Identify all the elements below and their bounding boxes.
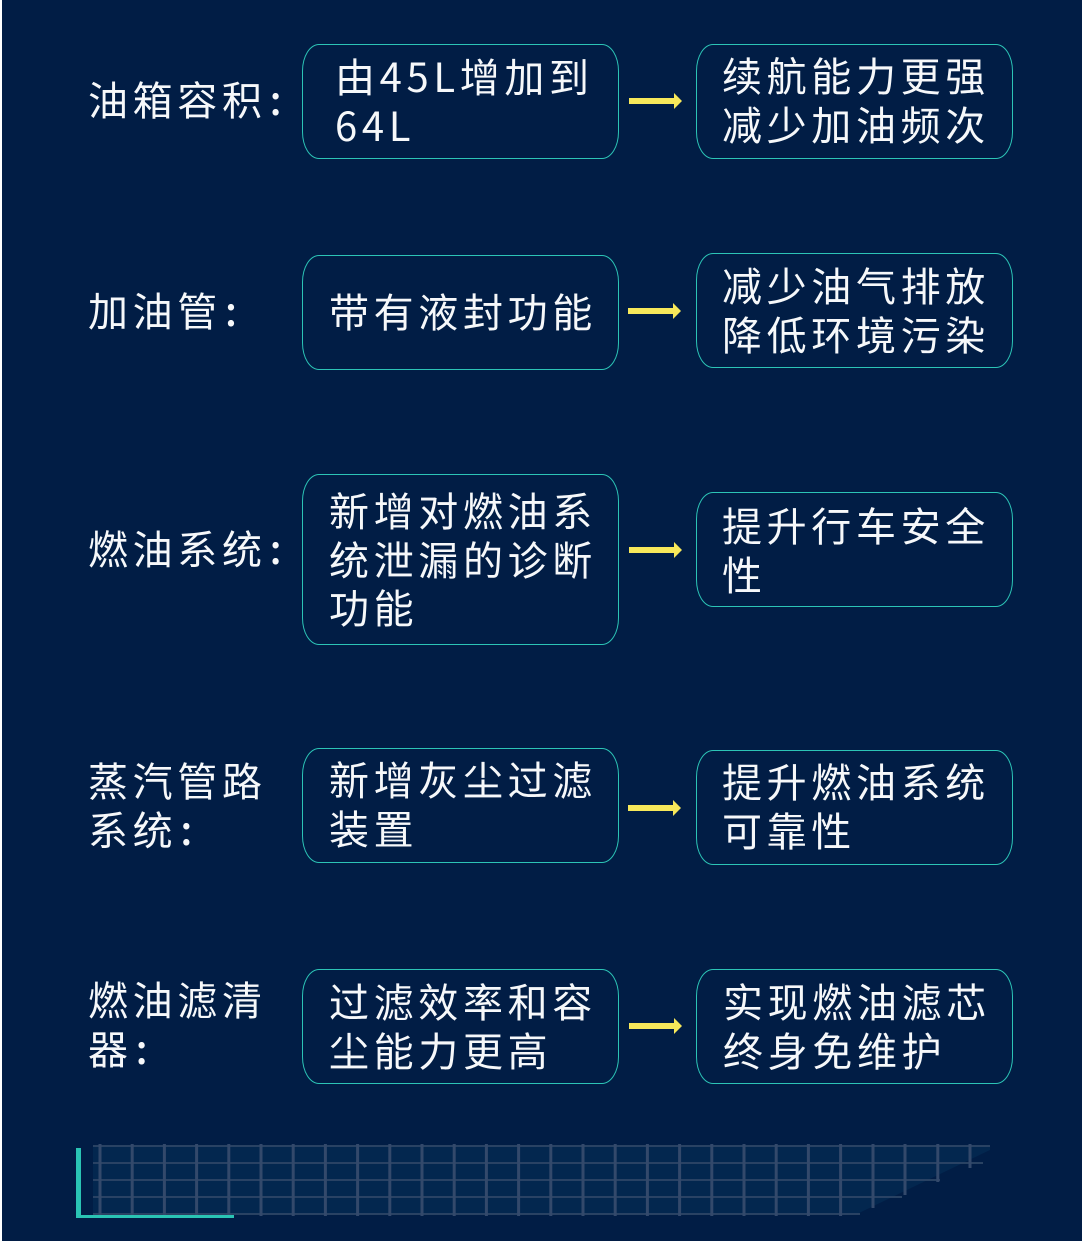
row 5 left box (302, 969, 619, 1084)
row 2 right box (696, 253, 1013, 368)
row 3 label: 燃油系统: (88, 518, 286, 576)
row 1 left text (335, 46, 594, 152)
teal corner bracket (76, 1148, 234, 1218)
row 3 left text: 统泄漏的诊断 (329, 528, 597, 586)
row 4 left text (329, 749, 597, 856)
row 1 label: 油箱容积: (88, 69, 286, 127)
row 4 label: 系统: (88, 798, 197, 856)
decorative grid panel (93, 1144, 990, 1216)
row 1 right text (722, 45, 990, 152)
row 1 left text: 64L (335, 94, 415, 152)
row 4 right text: 提升燃油系统 (722, 751, 990, 809)
row 4 left text: 装置 (329, 798, 418, 856)
row 1 right text: 续航能力更强 (722, 45, 990, 103)
row 5 left text: 尘能力更高 (329, 1020, 552, 1078)
row 3 arrow (629, 542, 682, 558)
row 5 right text: 终身免维护 (723, 1020, 946, 1078)
row 5 label: 燃油滤清 (88, 969, 267, 1027)
row 3 right box (696, 492, 1013, 607)
row 2 label: 加油管: (88, 280, 242, 338)
row 3 left box (302, 474, 619, 645)
row 5 right text (723, 971, 991, 1078)
row 2 right text: 降低环境污染 (722, 304, 990, 362)
row 4 label: 蒸汽管路 (88, 750, 267, 808)
row 4 right box (696, 750, 1013, 865)
row 3 right text (722, 495, 990, 602)
row 2 left box (302, 255, 619, 370)
row 4 left box (302, 748, 619, 863)
row 3 right text: 提升行车安全 (722, 495, 990, 553)
row 5 label: 器: (88, 1018, 152, 1076)
row 2 arrow (628, 303, 681, 319)
row 1 right text: 减少加油频次 (722, 94, 990, 152)
row 5 left text (329, 971, 597, 1078)
row 5 right box (696, 969, 1013, 1084)
row 4 arrow (628, 800, 681, 816)
row 2 right text (722, 255, 990, 362)
row 5 left text: 过滤效率和容 (329, 971, 597, 1029)
row 2 right text: 减少油气排放 (722, 255, 990, 313)
row 4 label (88, 750, 267, 856)
row 3 right text: 性 (722, 544, 767, 602)
row 4 right text (722, 751, 990, 858)
row 4 left text: 新增灰尘过滤 (329, 749, 597, 807)
row 1 arrow (629, 93, 682, 109)
row 1 left text: 由45L增加到 (335, 46, 594, 104)
row 5 right text: 实现燃油滤芯 (723, 971, 991, 1029)
row 1 right box (696, 44, 1013, 159)
row 1 left box (302, 44, 619, 159)
row 3 left text (329, 480, 597, 635)
row 4 right text: 可靠性 (722, 800, 856, 858)
row 5 label (88, 969, 267, 1076)
row 2 left text: 带有液封功能 (329, 281, 597, 339)
row 3 left text: 新增对燃油系 (329, 480, 597, 538)
row 3 left text: 功能 (329, 577, 418, 635)
row 5 arrow (629, 1018, 682, 1034)
